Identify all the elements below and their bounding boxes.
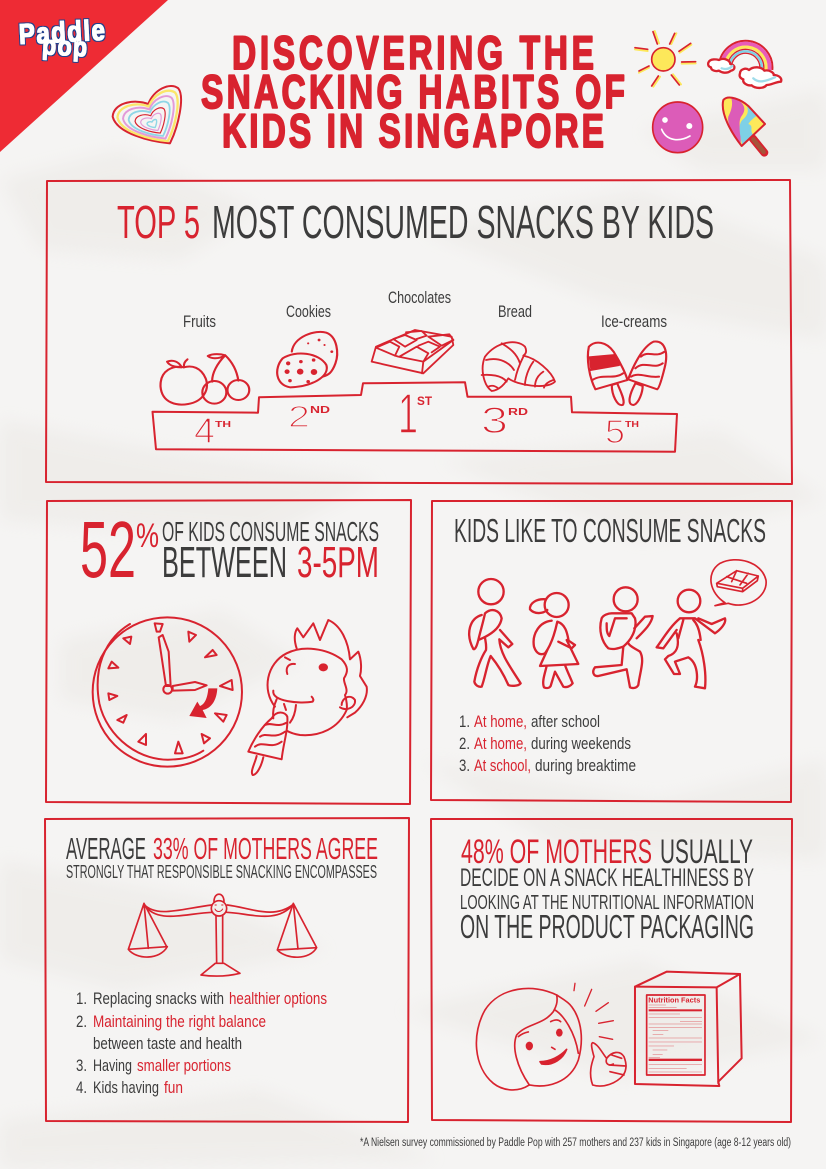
list: responsible snacking: between taste and health	[93, 1034, 242, 1053]
list: where snacks are eaten: after school	[531, 712, 600, 731]
heading: 33% of mothers	[66, 831, 378, 882]
icon: sun	[635, 31, 696, 87]
list: responsible snacking: fun	[164, 1078, 183, 1097]
list: where snacks are eaten: during weekends	[531, 734, 631, 753]
icon: nutrition facts box	[635, 972, 742, 1086]
panel: where kids snack	[431, 501, 792, 802]
list: responsible snacking: Kids having	[93, 1078, 159, 1097]
title: SNACKING HABITS OF	[201, 65, 625, 118]
list: where snacks are eaten: 2.	[459, 734, 470, 753]
list: responsible snacking: 2.	[76, 1012, 87, 1031]
icon: rainbow heart	[113, 86, 181, 143]
rank numbers: 4	[194, 410, 215, 451]
list: where snacks are eaten: 1.	[459, 712, 470, 731]
list: responsible snacking: Replacing snacks with	[93, 989, 224, 1008]
heading: 48% of mothers: 48% OF MOTHERS	[461, 833, 652, 871]
list: where snacks are eaten: At home,	[474, 712, 527, 731]
list: where snacks are eaten: during breaktime	[535, 756, 636, 775]
rank numbers: TH	[625, 419, 639, 429]
heading: time of day	[162, 516, 379, 587]
title: KIDS IN SINGAPORE	[222, 104, 604, 157]
snack labels	[183, 288, 667, 331]
podium	[152, 382, 677, 452]
icon: ice-creams	[588, 342, 666, 405]
snack labels: Bread	[498, 302, 532, 321]
panel: responsible snacking	[45, 818, 409, 1122]
rank numbers: 2	[288, 399, 310, 434]
panel: 52% between 3-5pm	[46, 500, 411, 804]
icon: smiley	[653, 102, 703, 153]
rank numbers: ND	[310, 405, 330, 416]
heading: 33% of mothers: 33% OF MOTHERS AGREE	[153, 831, 378, 866]
list: where snacks are eaten: At home,	[474, 734, 527, 753]
title: DISCOVERING THE	[232, 26, 594, 79]
icon: mother with thumbs up	[476, 983, 626, 1090]
list: responsible snacking: 1.	[76, 989, 87, 1008]
logo: Paddle Pop: Paddle	[18, 14, 106, 51]
heading: time of day: 3-5PM	[297, 538, 379, 587]
heading: 48% of mothers: USUALLY	[660, 833, 753, 871]
icon: boy licking ice-cream	[248, 620, 367, 775]
rank numbers: 1	[398, 382, 418, 446]
heading: time of day: OF KIDS CONSUME SNACKS	[162, 516, 379, 547]
stat: 52%: %	[136, 517, 159, 555]
rank numbers: ST	[417, 394, 433, 408]
heading: 33% of mothers: STRONGLY THAT RESPONSIBLE SNACKING ENCOMPASSES	[66, 862, 377, 882]
red corner banner	[0, 0, 168, 152]
icon: croissant	[482, 342, 555, 391]
stat: 52%: 52	[80, 505, 136, 594]
list: responsible snacking: Maintaining the right balance	[93, 1012, 266, 1031]
list: where snacks are eaten: At school,	[474, 756, 531, 775]
icon: chocolate speech bubble	[711, 560, 766, 606]
rank numbers: TH	[215, 419, 231, 429]
icon: clock	[93, 617, 242, 767]
icon: four children walking	[469, 579, 725, 688]
rank numbers: RD	[508, 407, 528, 418]
list: responsible snacking: smaller portions	[137, 1056, 231, 1075]
list: responsible snacking	[76, 989, 327, 1097]
icon: chocolate bar	[372, 330, 453, 373]
icon: balance scale	[128, 894, 317, 976]
rank numbers	[194, 382, 639, 451]
heading: top 5 most consumed snacks: TOP 5	[117, 196, 200, 248]
snack labels: Ice-creams	[601, 312, 667, 331]
icon: cookies	[277, 332, 337, 387]
icon: fruits	[161, 354, 249, 405]
heading: time of day: BETWEEN	[162, 538, 287, 587]
snack labels: Cookies	[286, 302, 331, 321]
rank numbers: 5	[605, 413, 625, 450]
icon: rainbow with clouds	[708, 41, 781, 88]
panel: packaging information	[431, 819, 792, 1122]
logo: Paddle Pop: pop	[41, 32, 88, 63]
rank numbers: 3	[481, 400, 508, 441]
list: responsible snacking: Having	[93, 1056, 132, 1075]
snack labels: Chocolates	[388, 288, 451, 307]
heading: 33% of mothers: AVERAGE	[66, 831, 146, 866]
snack labels: Fruits	[183, 312, 216, 331]
list: where snacks are eaten	[459, 712, 636, 775]
nutrition facts label: Nutrition Facts	[648, 998, 700, 1005]
list: responsible snacking: healthier options	[229, 989, 327, 1008]
list: where snacks are eaten: 3.	[459, 756, 470, 775]
heading: 48% of mothers	[460, 833, 754, 945]
list: responsible snacking: 3.	[76, 1056, 87, 1075]
title	[201, 26, 625, 157]
list: responsible snacking: 4.	[76, 1078, 87, 1097]
panel: top 5 snacks	[46, 180, 792, 484]
icon: popsicle	[723, 97, 765, 153]
